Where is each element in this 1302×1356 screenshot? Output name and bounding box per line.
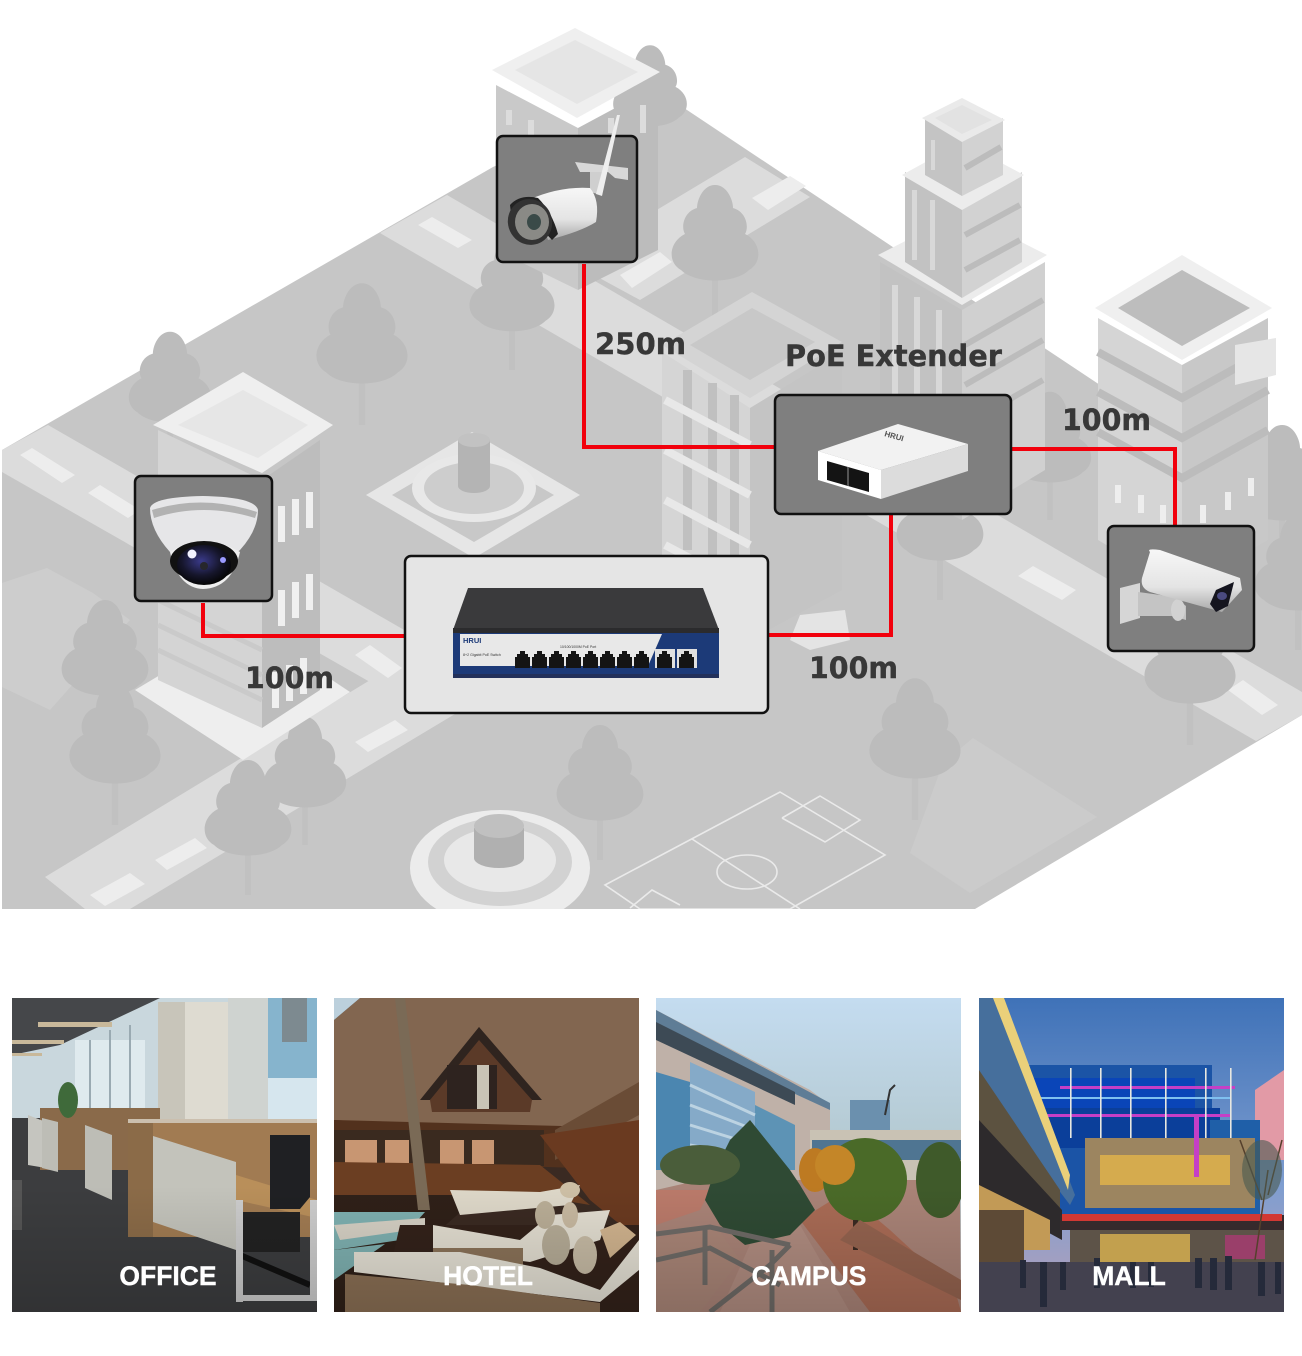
building: top back bbox=[492, 28, 660, 290]
label: 100m centre: 100m bbox=[809, 651, 898, 685]
road grid bbox=[2, 157, 1302, 909]
building: far right bbox=[1096, 255, 1276, 545]
icon: PoE extender box bbox=[818, 424, 968, 499]
building: tower right bbox=[878, 98, 1047, 520]
panel: dome camera bbox=[135, 476, 272, 601]
icon: PoE switch bbox=[453, 588, 719, 678]
ground plane bbox=[2, 92, 1302, 909]
road markings bbox=[20, 176, 1278, 906]
icon: dome camera bbox=[150, 496, 258, 589]
panel: bullet camera right bbox=[1108, 526, 1254, 651]
caption: OFFICE: OFFICE bbox=[119, 1261, 217, 1291]
panel: PoE extender device bbox=[775, 395, 1011, 514]
icon: wireless bullet camera bbox=[500, 115, 628, 252]
ethernet ports bbox=[515, 649, 697, 668]
left pad bbox=[2, 568, 130, 710]
plaza fountain bbox=[366, 432, 580, 558]
label: 100m right: 100m bbox=[1062, 403, 1151, 437]
city background illustration bbox=[2, 28, 1302, 926]
icon: PoE switch: 8+2 Gigabit PoE Switch bbox=[463, 653, 501, 657]
caption: MALL: MALL bbox=[1092, 1261, 1166, 1291]
label: PoE Extender: PoE Extender bbox=[785, 339, 1003, 373]
photo: office bbox=[12, 998, 317, 1312]
icon: PoE switch: HRUI bbox=[463, 636, 481, 645]
building: left bbox=[135, 372, 350, 760]
red connection cables bbox=[203, 264, 1175, 636]
label: 100m left: 100m bbox=[245, 661, 334, 695]
round fountain bbox=[410, 810, 590, 909]
lower right pad bbox=[910, 738, 1097, 893]
label: 250m: 250m bbox=[595, 327, 686, 361]
building: centre bbox=[662, 292, 850, 650]
photo: hotel bbox=[334, 998, 639, 1312]
icon: PoE switch: 10/100/1000M PoE Port bbox=[560, 645, 596, 649]
caption: HOTEL: HOTEL bbox=[443, 1261, 533, 1291]
caption: CAMPUS: CAMPUS bbox=[752, 1261, 866, 1291]
soccer field bbox=[605, 792, 885, 909]
photo: campus bbox=[656, 998, 964, 1312]
panel: wireless bullet camera bbox=[497, 115, 637, 262]
icon: box security camera bbox=[1120, 549, 1242, 624]
icon: PoE extender box: HRUI bbox=[883, 429, 905, 443]
trees bbox=[62, 45, 1302, 895]
photo: mall bbox=[979, 998, 1284, 1312]
panel: PoE switch bbox=[405, 556, 768, 713]
